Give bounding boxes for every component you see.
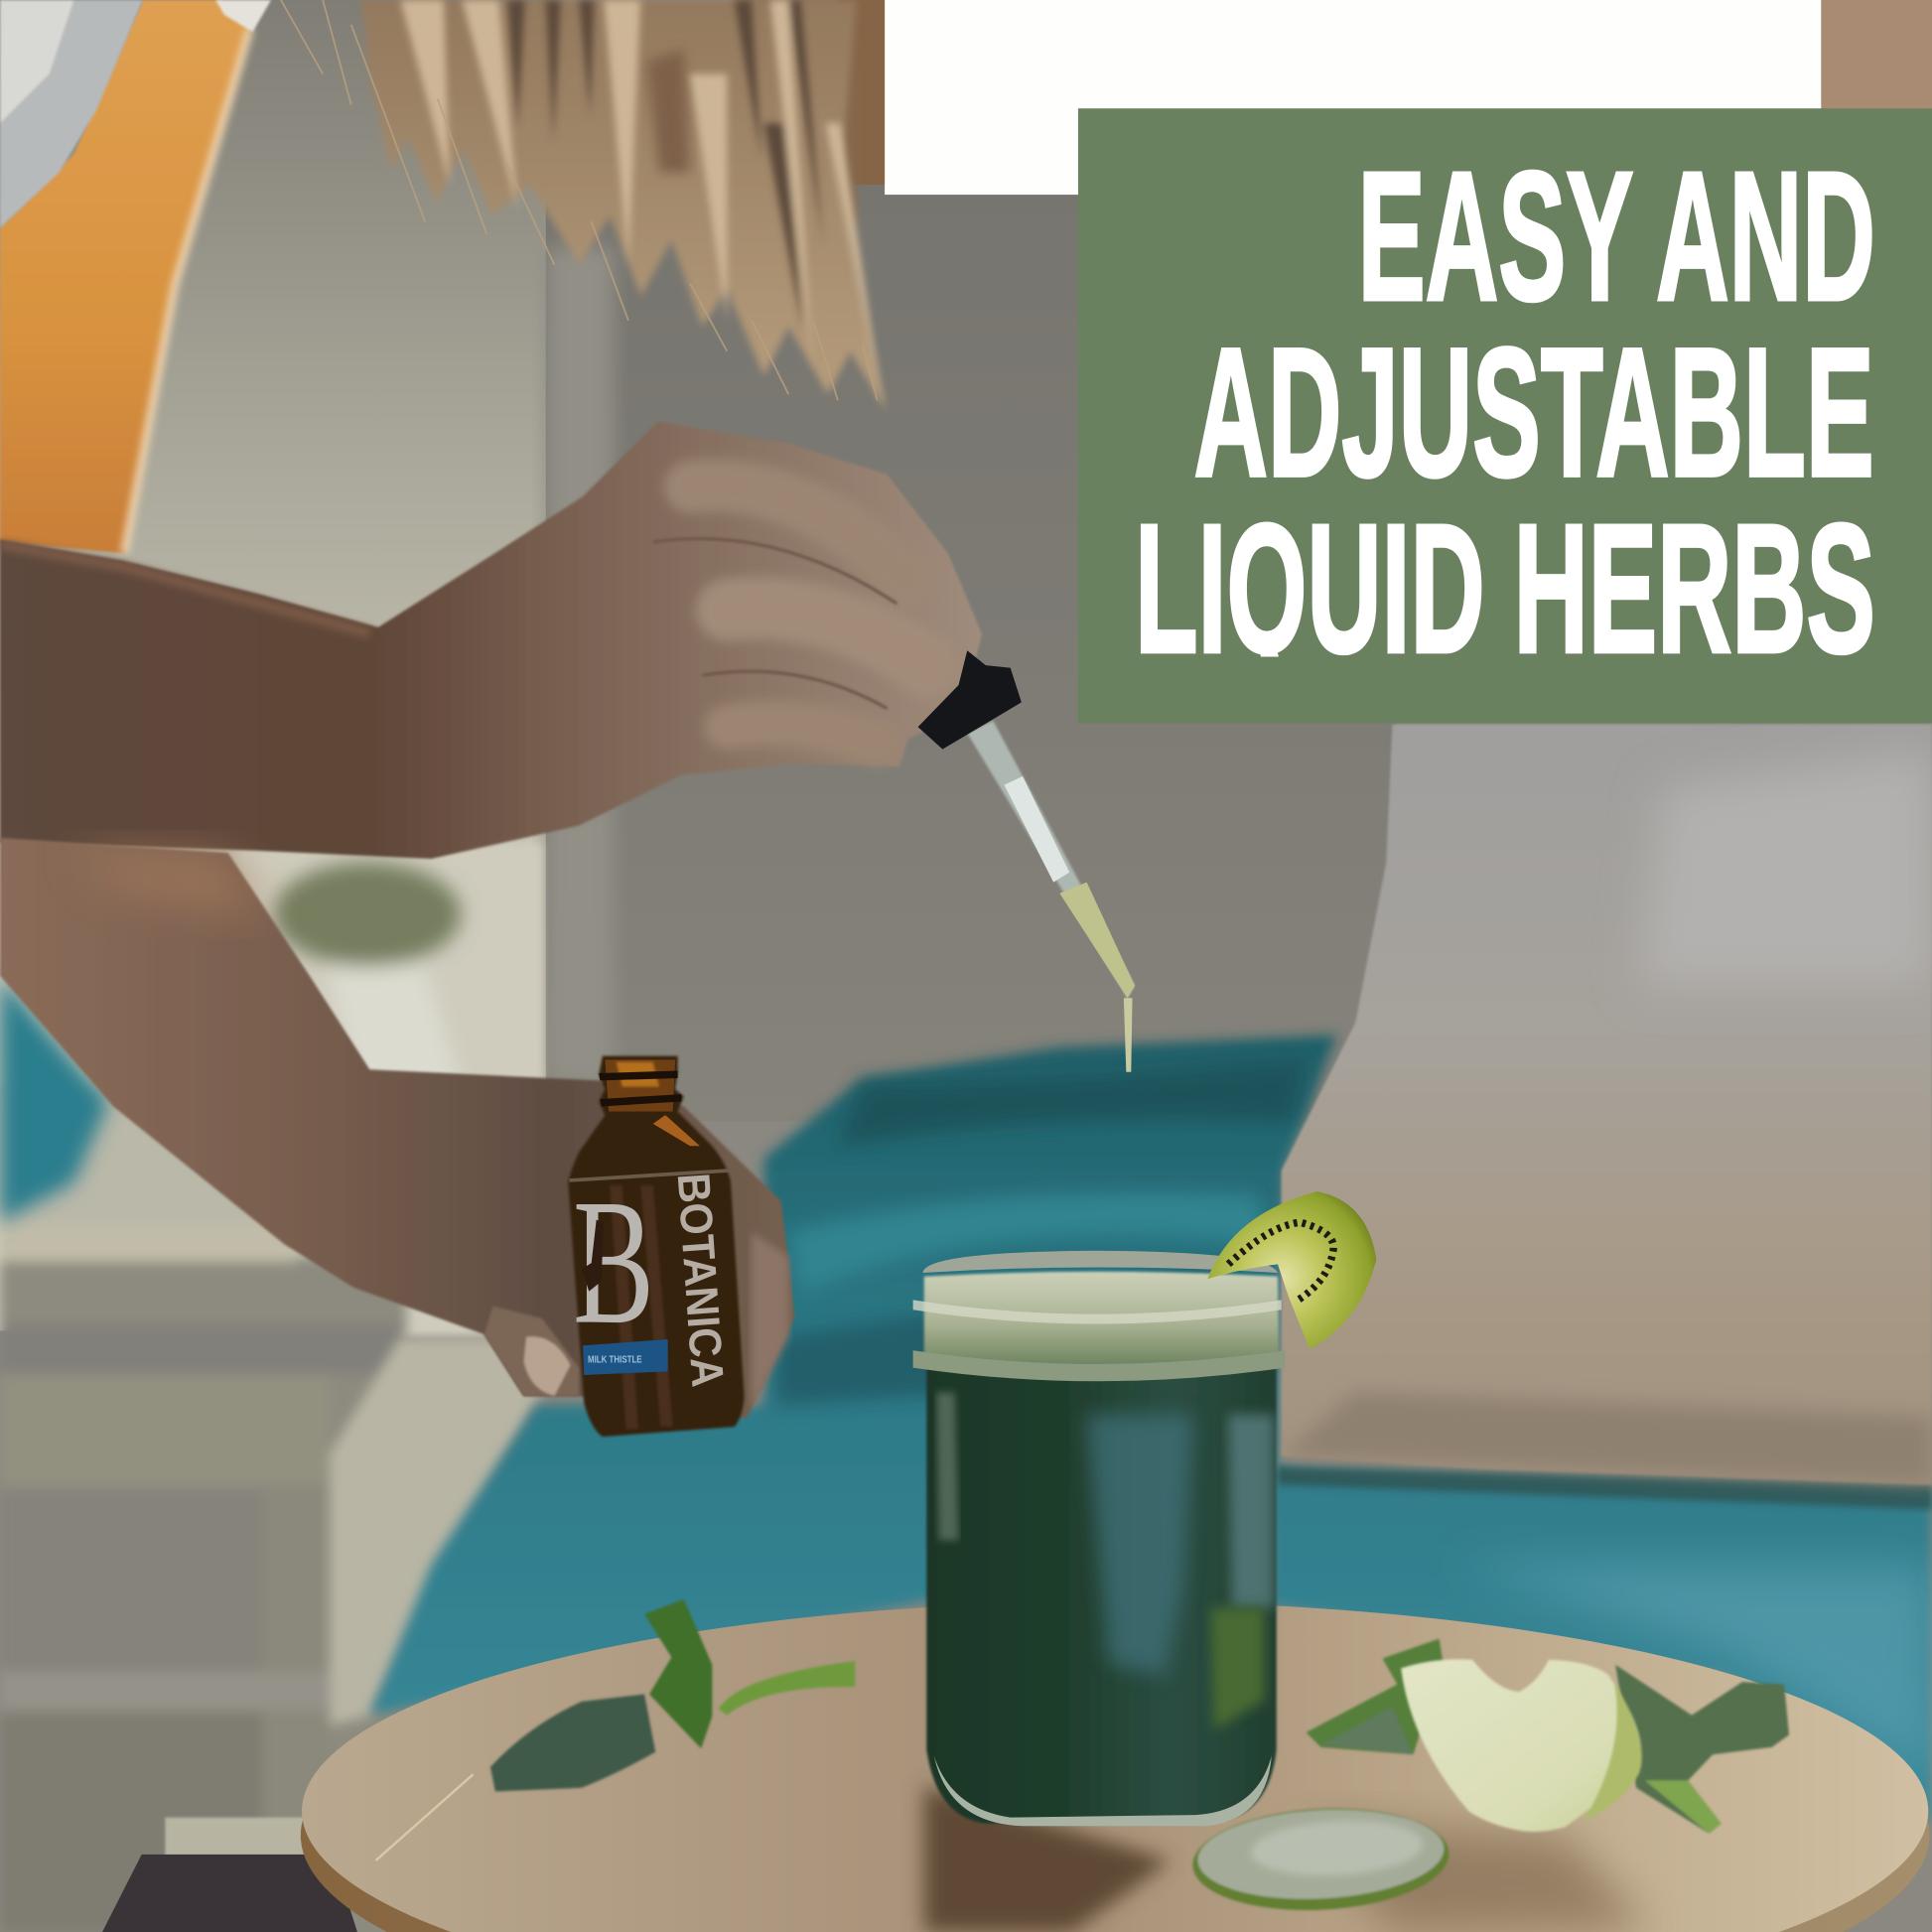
herb drip [1124,998,1133,1072]
kiwi slice [1207,1191,1376,1349]
teal blanket [369,1035,1932,1824]
fingers [690,485,926,743]
foam [924,1272,1279,1365]
dropper glass tube [967,721,1135,998]
herb sprig left [490,1599,855,1792]
tube highlight [1004,776,1069,883]
jar of green juice [913,1251,1285,1826]
jar body [926,1365,1277,1824]
blue label: MILK THISTLE [588,1355,642,1366]
bottle label stripes [610,1185,673,1430]
jar base edge [934,1756,1272,1826]
sofa side highlight [546,246,614,1084]
white shirt [0,0,271,228]
jar green reflection [1211,1608,1264,1729]
green title panel [1078,108,1932,724]
light strands [400,0,883,407]
hair [281,0,886,410]
round wooden table [301,1601,1930,1932]
table crack [376,1774,474,1861]
logo leaf [582,1220,604,1292]
sofa back [546,185,1396,1121]
jar shadow [924,1787,1171,1932]
fingertips lit [752,1232,788,1411]
bottle logo B: B [573,1164,654,1362]
arm lit edge [124,29,250,553]
apple shadow [1307,1824,1651,1932]
bottle neck [605,1059,675,1111]
apple slice [1401,1659,1642,1832]
window frame left [838,0,885,185]
upper arm and hand with dropper [0,421,982,859]
herbs right of jar [1307,1639,1789,1834]
amber glass [568,1056,745,1437]
plant in background [274,863,462,1090]
bottle [568,1056,745,1437]
arm warm light [73,850,265,918]
nightstand [0,1084,542,1932]
window [885,0,1824,195]
thumbnail [523,1336,571,1396]
orange sleeve arm [0,0,250,553]
arm top highlight [0,545,369,633]
blue label [583,1339,668,1375]
title: easy and adjustable liquid herbs [1140,169,1872,657]
teal blob at left [0,976,108,1222]
wall [0,0,548,1330]
lime slice [1190,1802,1451,1916]
brand text: BOTANICA [668,1172,735,1389]
jar blue reflection [1087,1415,1192,1676]
thumb [484,1307,579,1396]
dropper black cap [918,650,1022,750]
lower arm and hand [0,838,794,1418]
dropper liquid [1059,883,1135,998]
window frame right [1821,0,1932,111]
dark strands [507,0,823,333]
shoulder highlight [653,1115,700,1146]
dropper [918,650,1135,1072]
jar rim [923,1251,1278,1273]
cream wall below arm [239,844,542,1337]
pillow [1282,725,1932,1484]
dark furniture bottom left [102,1818,357,1932]
